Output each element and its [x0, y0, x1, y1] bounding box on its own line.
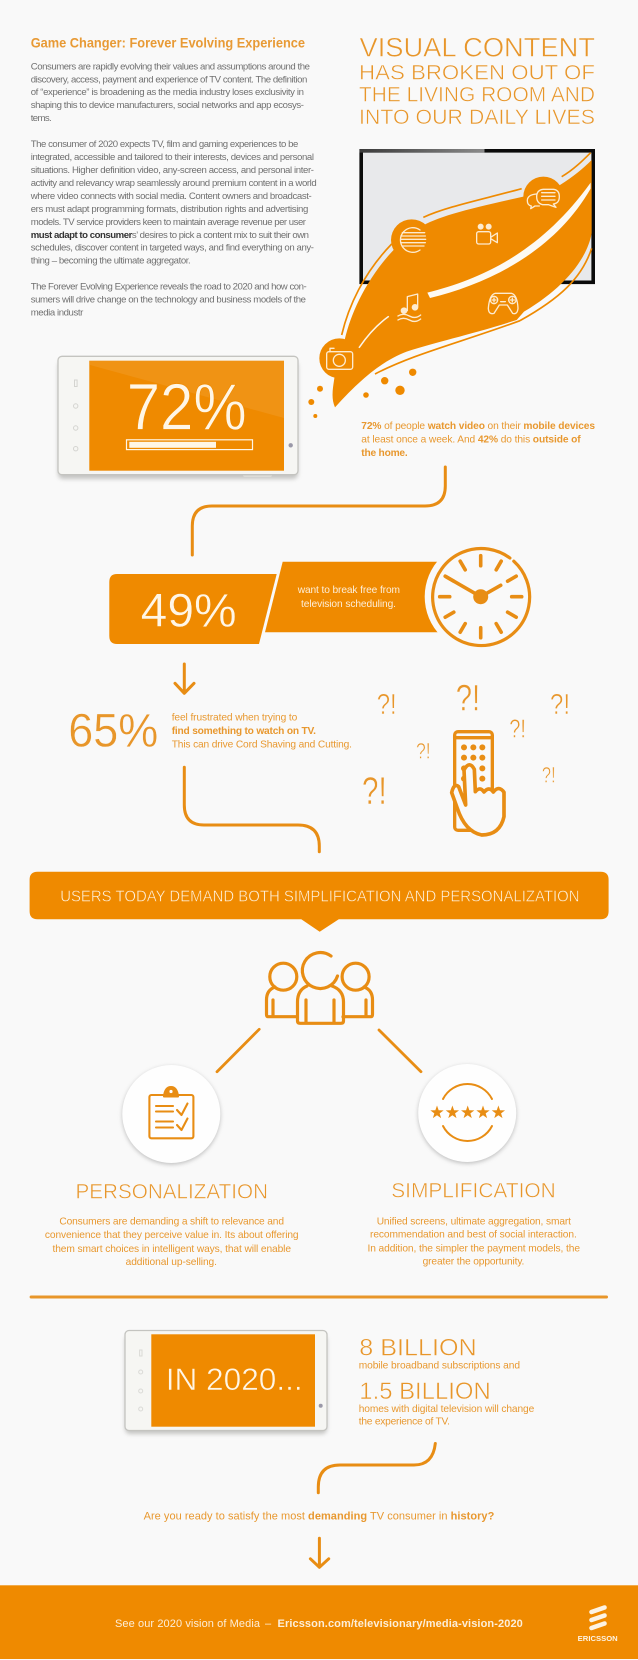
confusion marks: ?! [377, 689, 397, 721]
closing question: Are you ready to satisfy the most demanding TV consumer in history? [144, 1510, 495, 1522]
main title: THE LIVING ROOM AND [359, 84, 595, 107]
intro text block [30, 36, 317, 318]
confusion marks: ?! [509, 713, 526, 743]
icon: music notes [398, 294, 421, 321]
icon: five stars in ring [430, 1084, 505, 1141]
1.5 billion: 1.5 BILLION [359, 1378, 491, 1405]
personalization icon circle [122, 1065, 220, 1164]
intro paragraph 1: shaping this to device manufacturers, social networks and app ecosys- [31, 100, 304, 111]
2020 statistics: the experience of TV. [359, 1416, 450, 1427]
intro paragraph 2: models. TV service providers keen to maintain average revenue per user [31, 217, 307, 228]
72% caption: at least once a week. And 42% do this outside of [361, 435, 581, 446]
panel: simplification [368, 1064, 580, 1268]
television frame [360, 149, 593, 282]
intro paragraph 2 [30, 139, 317, 266]
65% description: find something to watch on TV. [172, 726, 316, 737]
2020 statistics: homes with digital television will change [359, 1404, 535, 1415]
intro paragraph 1: tems. [31, 113, 52, 124]
icon: chat bubbles [527, 189, 559, 209]
intro paragraph 1: of “experience” is broadening as the media industry loses exclusivity in [31, 87, 304, 98]
Ericsson logo: ERICSSON [578, 1634, 618, 1643]
icon: clock [433, 549, 530, 646]
simplification text: greater the opportunity. [423, 1257, 524, 1268]
content leaf swoosh with media icons [319, 153, 592, 407]
intro paragraph 2: must adapt to consumers’ desires to pick a content mix to suit their own [31, 230, 309, 241]
simplification icon circle [418, 1064, 516, 1164]
phone showing 72% [58, 356, 298, 479]
leaf body [319, 153, 592, 407]
icon: hand on remote control [452, 732, 504, 835]
intro paragraph 1: Consumers are rapidly evolving their values and assumptions around the [31, 62, 310, 72]
intro paragraph 1: discovery, access, payment and experience of TV content. The definition [31, 74, 307, 86]
65% statistic [68, 704, 352, 757]
8 billion: 8 BILLION [359, 1335, 477, 1362]
personalization text: Consumers are demanding a shift to relevance and [59, 1217, 284, 1228]
65% description [172, 712, 352, 750]
personalization text: them smart choices in intelligent ways, that will enable [52, 1244, 291, 1255]
footer link text: See our 2020 vision of Media [115, 1618, 261, 1630]
footer link text: Ericsson.com/televisionary/media-vision-2020 [278, 1618, 523, 1630]
Ericsson logo [578, 1608, 618, 1643]
72% caption: 72% of people watch video on their mobile devices [361, 421, 595, 432]
block: break free from scheduling: want to break free from [297, 585, 400, 596]
icon: video camera [477, 224, 497, 244]
2020 statistics [359, 1335, 535, 1427]
arrow down to 65% [175, 664, 194, 693]
simplification text: In addition, the simpler the payment models, the [368, 1243, 580, 1254]
footer link text [115, 1618, 523, 1630]
2020 statistics: mobile broadband subscriptions and [359, 1361, 520, 1372]
connector: caption to 49% [192, 467, 445, 555]
intro paragraph 2: thing – becoming the ultimate aggregator. [31, 256, 191, 266]
connector lines to the two pillars [217, 1029, 421, 1072]
icon: camera [327, 348, 353, 369]
simplification text: Unified screens, ultimate aggregation, smart [377, 1216, 571, 1227]
main title: HAS BROKEN OUT OF [359, 61, 595, 84]
personalization text [45, 1217, 299, 1268]
intro paragraph 2: The consumer of 2020 expects TV, film and gaming experiences to be [31, 139, 298, 150]
confusion marks: ?! [542, 763, 556, 788]
connector: statistics to question [318, 1444, 435, 1493]
icon: game controller [488, 293, 518, 314]
personalization heading: PERSONALIZATION [76, 1180, 268, 1203]
intro paragraph 2: situations. Higher definition video, any-screen access, and personal inter- [31, 165, 314, 176]
49% figure: 49% [141, 584, 237, 637]
simplification heading: SIMPLIFICATION [391, 1180, 556, 1203]
banner: users today demand: USERS TODAY DEMAND BOTH SIMPLIFICATION AND PERSONALIZATION [60, 889, 579, 906]
intro paragraph 2: schedules, discover content in targeted ways, and find everything on any- [31, 242, 314, 254]
connector: 65% to banner [184, 767, 319, 852]
dots from the leaf [308, 369, 416, 418]
confusion marks: ?! [550, 689, 570, 721]
arrow down to footer [310, 1538, 329, 1567]
simplification text: recommendation and best of social interaction. [370, 1230, 577, 1241]
phone showing IN 2020 [125, 1330, 327, 1434]
intro paragraph 2: where video connects with social media. Content owners and broadcast- [30, 191, 312, 202]
footer link text: – [265, 1618, 272, 1630]
intro paragraph 3: The Forever Evolving Experience reveals the road to 2020 and how con- [31, 282, 307, 292]
intro paragraph 2: ers must adapt programming formats, distribution rights and advertising [31, 204, 308, 215]
personalization text: additional up-selling. [126, 1257, 217, 1268]
block: break free from scheduling [265, 541, 537, 653]
65% statistic: 65% [68, 704, 158, 757]
main title: INTO OUR DAILY LIVES [359, 106, 595, 129]
panel: personalization [45, 1065, 299, 1268]
intro paragraph 3: sumers will drive change on the technology and business models of the [31, 294, 306, 306]
simplification text [368, 1216, 580, 1268]
49% block [109, 574, 277, 644]
intro paragraph 2: integrated, accessible and tailored to their interests, devices and personal [31, 152, 314, 163]
main title: VISUAL CONTENT [360, 33, 595, 63]
icon: group of people [266, 953, 372, 1023]
intro paragraph 2: activity and relevancy wrap seamlessly around premium content in a world [31, 178, 317, 189]
intro paragraph 3: media industr [31, 308, 84, 318]
65% description: This can drive Cord Shaving and Cutting. [172, 739, 352, 750]
icon: menu circle [400, 228, 426, 252]
progress bar [126, 440, 252, 450]
intro paragraph 3 [31, 282, 307, 318]
confusion marks [362, 678, 570, 813]
block: break free from scheduling: television scheduling. [301, 599, 396, 610]
phone showing IN 2020: IN 2020... [166, 1361, 303, 1397]
confusion marks: ?! [456, 678, 480, 719]
intro paragraph 1 [31, 62, 310, 124]
72% figure: 72% [127, 369, 247, 443]
icon: checklist clipboard [149, 1087, 193, 1138]
72% caption [361, 421, 595, 459]
65% description: feel frustrated when trying to [172, 712, 298, 723]
main title [359, 33, 595, 129]
banner: users today demand [30, 872, 609, 932]
confusion marks: ?! [362, 770, 387, 813]
footer band [0, 1585, 638, 1659]
confusion marks: ?! [416, 739, 431, 764]
intro heading: Game Changer: Forever Evolving Experience [31, 36, 305, 52]
personalization text: convenience that they perceive value in. Its about offering [45, 1230, 299, 1241]
72% caption: the home. [361, 448, 408, 459]
